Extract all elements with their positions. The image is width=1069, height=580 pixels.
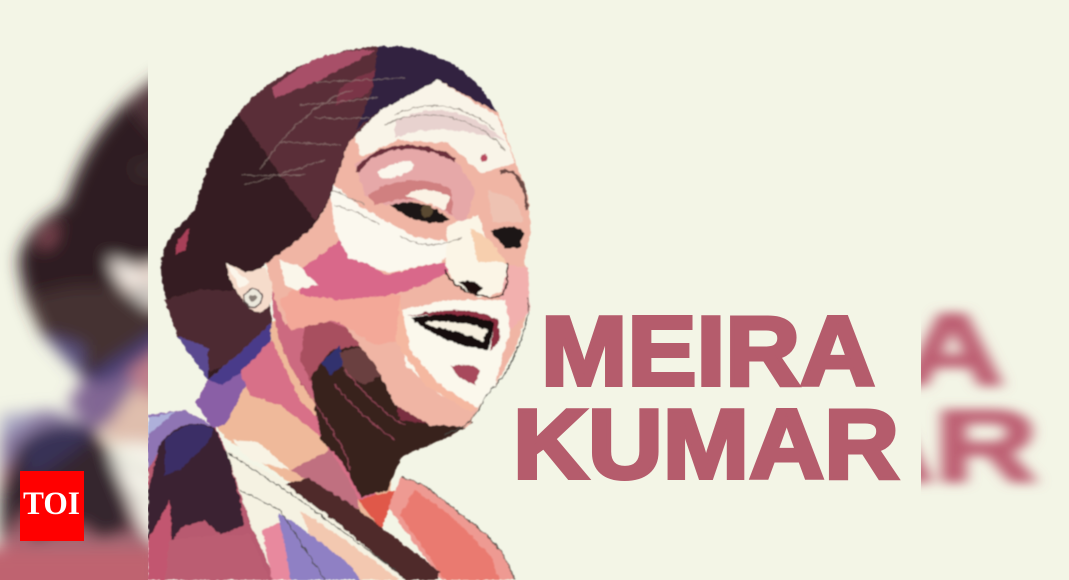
blurred enlarged backdrop: name letters (right side) [921,305,1044,490]
blurred enlarged backdrop: name letters (right side): KUMAR [505,390,1038,503]
blurred enlarged backdrop: name letters (right side): MEIRA [543,293,1004,407]
portrait illustration [148,47,531,580]
TOI logo: TOI [23,486,80,522]
TOI logo [20,471,84,541]
name heading: KUMAR [513,389,899,499]
name heading: MEIRA [541,296,875,406]
blurred enlarged backdrop: portrait (left side) [0,68,148,580]
central sharp panel [148,0,921,580]
blurred backdrop: pink lower band [0,548,160,580]
name heading [518,315,901,481]
